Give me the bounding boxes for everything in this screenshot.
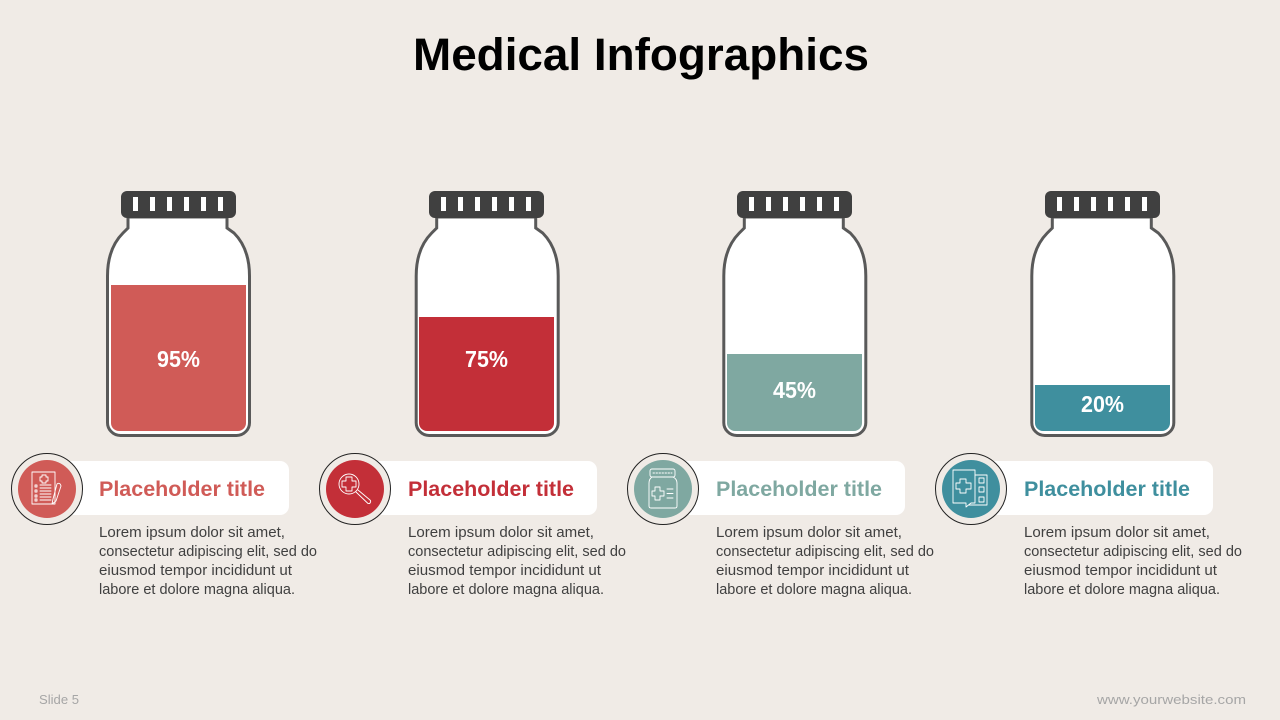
icon: magnifier with cross	[320, 454, 390, 524]
item text 3: eiusmod tempor incididunt ut	[716, 563, 909, 579]
item text 4: Lorem ipsum dolor sit amet,	[1024, 525, 1210, 541]
title card 3	[663, 461, 905, 515]
value 75%: 75%	[465, 346, 508, 372]
panel: item 2	[320, 454, 626, 598]
panel: bottle 95%	[107, 191, 250, 436]
bottle fill 75%	[419, 317, 554, 431]
value 20%: 20%	[1081, 391, 1124, 417]
value 95%: 95%	[157, 346, 200, 372]
item text 1: eiusmod tempor incididunt ut	[99, 563, 292, 579]
panel: bottle 20%	[1032, 191, 1174, 436]
icon: medical leaflet	[936, 454, 1006, 524]
value 45%: 45%	[773, 377, 816, 403]
item text 3: consectetur adipiscing elit, sed do	[716, 544, 934, 560]
item text 1: consectetur adipiscing elit, sed do	[99, 544, 317, 560]
title card 1	[47, 461, 289, 515]
item text 2: consectetur adipiscing elit, sed do	[408, 544, 626, 560]
item title 2: Placeholder title	[408, 478, 574, 501]
item text 2: labore et dolore magna aliqua.	[408, 582, 604, 598]
title card 2	[355, 461, 597, 515]
icon: medical report	[12, 454, 82, 524]
bottle fill 95%	[111, 285, 246, 431]
panel: item 1	[12, 454, 317, 598]
item text 2: Lorem ipsum dolor sit amet,	[408, 525, 594, 541]
item text 1: Lorem ipsum dolor sit amet,	[99, 525, 285, 541]
item text 4: eiusmod tempor incididunt ut	[1024, 563, 1217, 579]
panel: item 4	[936, 454, 1242, 598]
panel: bottle 45%	[724, 191, 866, 436]
item text 3: labore et dolore magna aliqua.	[716, 582, 912, 598]
item text 4	[1024, 525, 1242, 598]
panel: item 3	[628, 454, 934, 598]
slide number: Slide 5	[39, 692, 79, 707]
item text 1	[99, 525, 317, 598]
title card 4	[971, 461, 1213, 515]
title: Medical Infographics	[413, 29, 869, 80]
item title 1: Placeholder title	[99, 478, 265, 501]
icon: medicine bottle	[628, 454, 698, 524]
item title 4: Placeholder title	[1024, 478, 1190, 501]
item text 3: Lorem ipsum dolor sit amet,	[716, 525, 902, 541]
item title 3: Placeholder title	[716, 478, 882, 501]
bottle fill 20%	[1035, 385, 1170, 431]
item text 4: consectetur adipiscing elit, sed do	[1024, 544, 1242, 560]
bottle fill 45%	[727, 354, 862, 431]
item text 4: labore et dolore magna aliqua.	[1024, 582, 1220, 598]
website: www.yourwebsite.com	[1096, 692, 1246, 707]
item text 2: eiusmod tempor incididunt ut	[408, 563, 601, 579]
panel: bottle 75%	[416, 191, 558, 436]
item text 3	[716, 525, 934, 598]
item text 1: labore et dolore magna aliqua.	[99, 582, 295, 598]
item text 2	[408, 525, 626, 598]
